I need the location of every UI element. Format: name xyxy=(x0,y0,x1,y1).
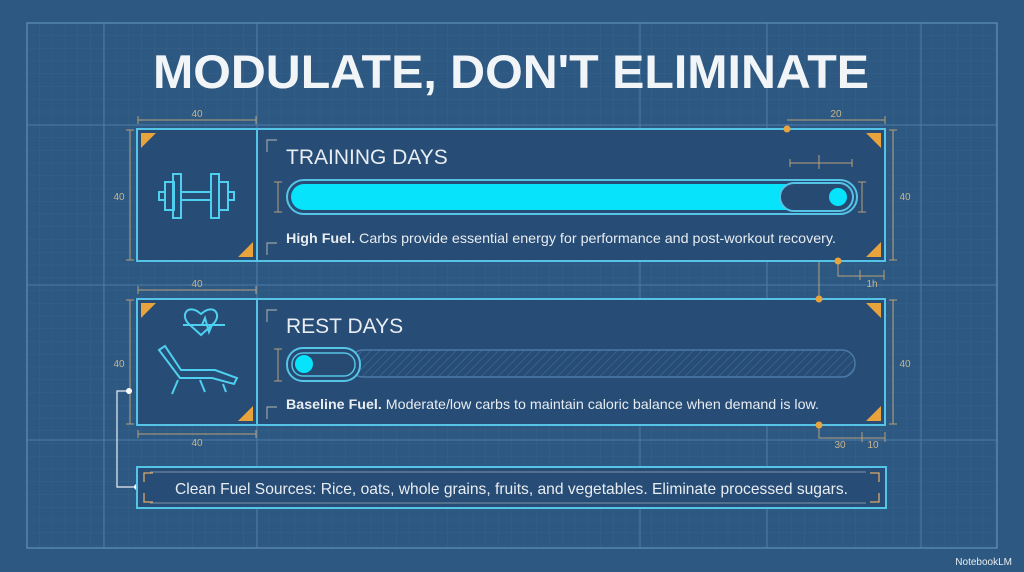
bar: high fuel xyxy=(287,180,857,214)
connector to fuel sources xyxy=(117,388,140,490)
panel: rest days xyxy=(137,299,885,425)
description: Baseline Fuel. Moderate/low carbs to maintain caloric balance when demand is low. xyxy=(286,396,819,412)
title: MODULATE, DON'T ELIMINATE xyxy=(153,45,869,98)
heading: REST DAYS xyxy=(286,315,403,338)
icon: dumbbell xyxy=(159,174,234,218)
text: 10 xyxy=(867,440,879,451)
text: 40 xyxy=(899,359,911,370)
dimension annotations xyxy=(126,116,897,442)
text: 40 xyxy=(191,279,203,290)
text: 20 xyxy=(830,109,842,120)
text: 30 xyxy=(834,440,846,451)
description: High Fuel. Carbs provide essential energy for performance and post-workout recovery. xyxy=(286,230,836,246)
text: 40 xyxy=(113,359,125,370)
text: 40 xyxy=(899,192,911,203)
heading: TRAINING DAYS xyxy=(286,146,448,169)
bar: baseline fuel xyxy=(287,348,855,381)
text: 40 xyxy=(191,438,203,449)
icon: lounger with heart xyxy=(159,309,237,394)
callout: clean fuel sources: Clean Fuel Sources: Rice, oats, whole grains, fruits, and vegetables. Eliminate processed sugars. xyxy=(175,481,848,498)
text: 1h xyxy=(866,279,878,290)
text: 40 xyxy=(191,109,203,120)
panel: training days xyxy=(137,129,885,261)
text: 40 xyxy=(113,192,125,203)
watermark: NotebookLM xyxy=(955,557,1012,568)
callout: clean fuel sources xyxy=(137,467,886,508)
